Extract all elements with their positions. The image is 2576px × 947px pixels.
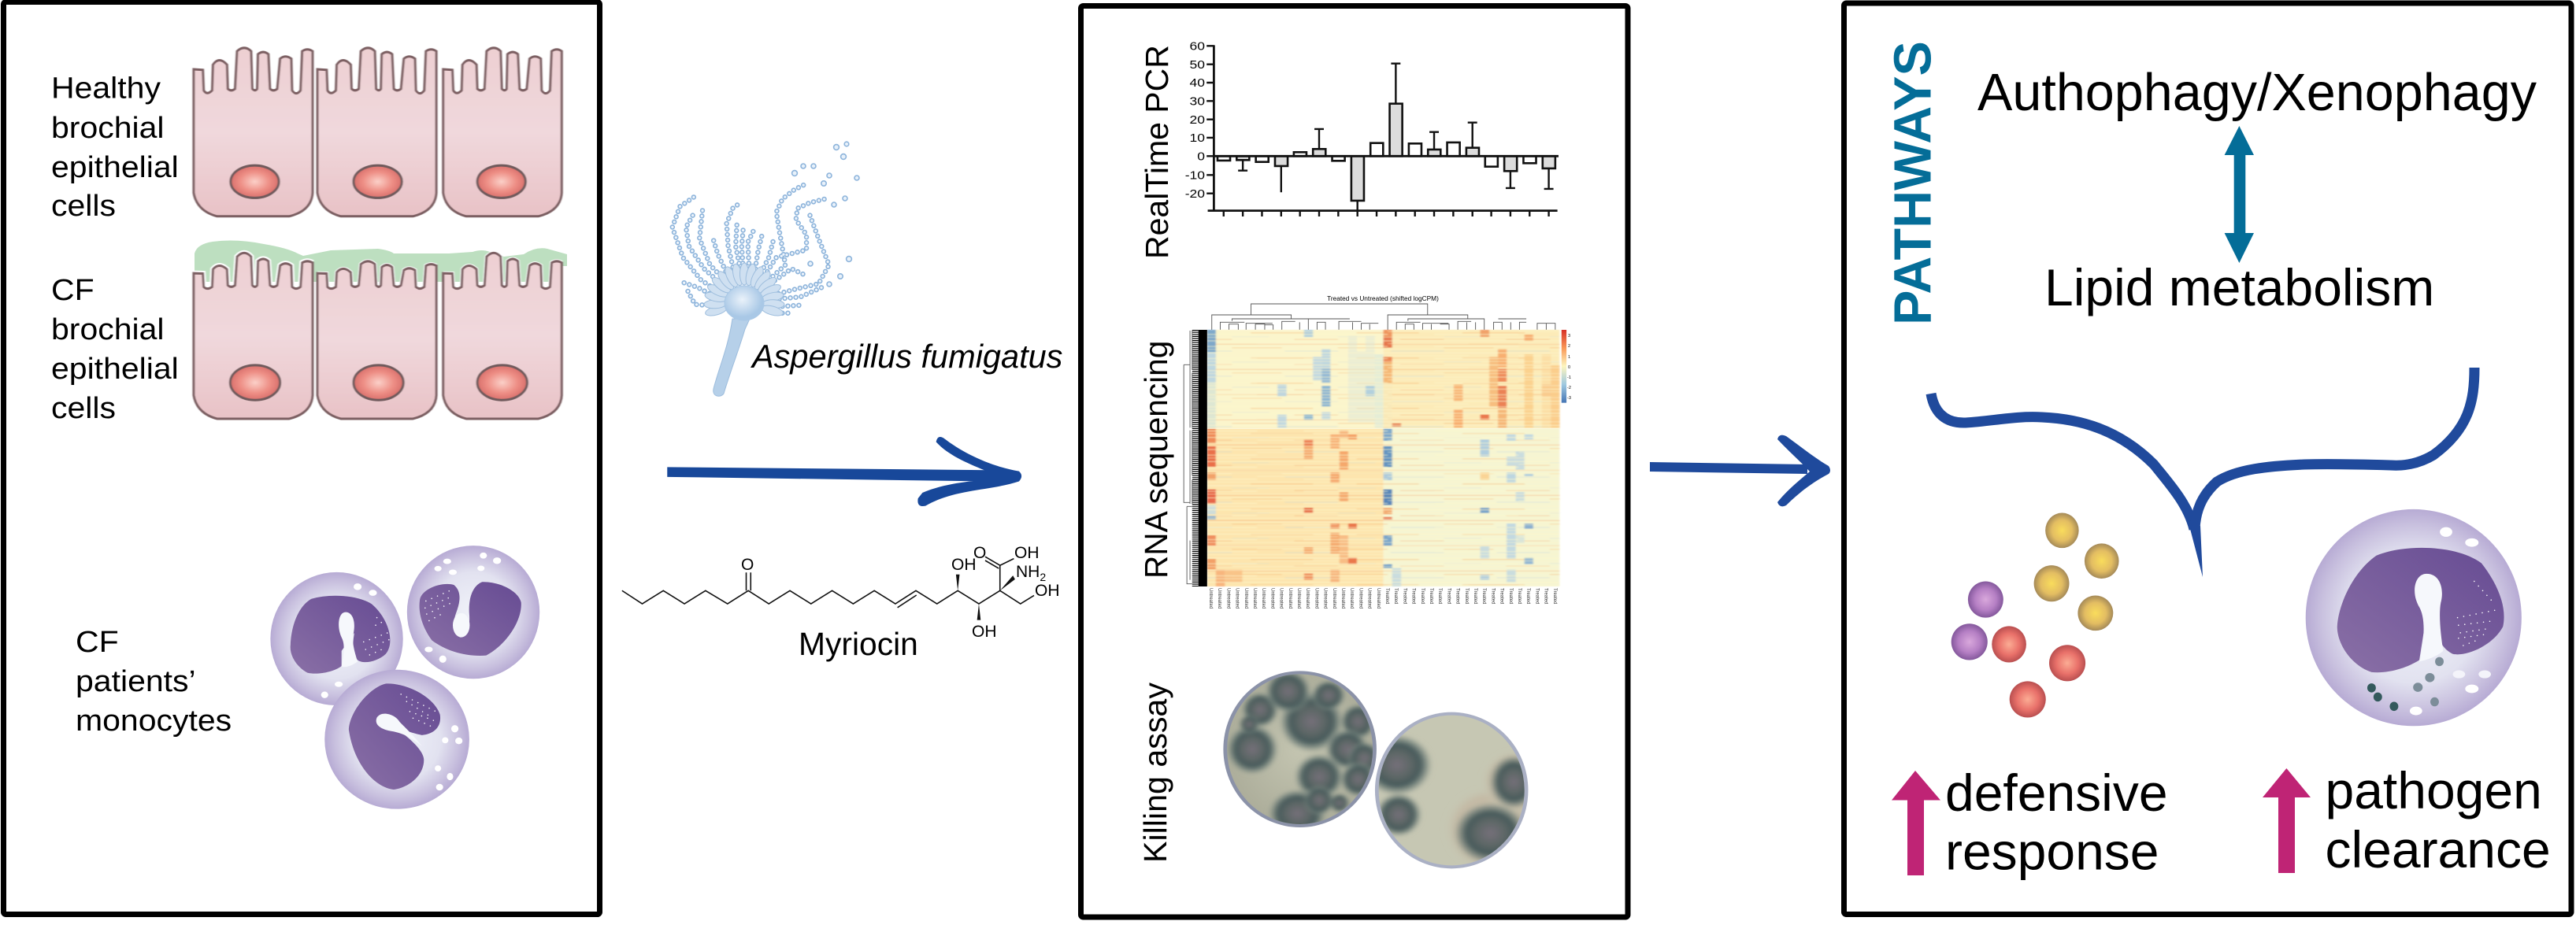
- panel: pathways and outcomes: [1844, 3, 2571, 915]
- loose spores: [792, 142, 859, 287]
- label: pathogen clearance: [2325, 761, 2551, 879]
- column labels: Treated: [1544, 588, 1548, 604]
- panel: experimental assays: [1080, 6, 1628, 917]
- column labels: Treated: [1490, 588, 1495, 604]
- label: Lipid metabolism: Lipid metabolism: [2044, 258, 2434, 316]
- diagram: myriocin structure: O: [973, 544, 986, 562]
- column labels: Treated: [1508, 588, 1513, 604]
- heatmap: treated vs untreated: -3: [1567, 396, 1571, 401]
- column labels: Treated: [1384, 588, 1389, 604]
- top dendrogram: [1212, 304, 1555, 330]
- label: healthy bronchial epithelial cells: [51, 72, 179, 223]
- label: CF patients' monocytes: patients’: [76, 664, 196, 698]
- label: CF bronchial epithelial cells: epithelial: [51, 352, 179, 386]
- bar chart: RealTime PCR: 10: [1190, 131, 1205, 145]
- bar chart: RealTime PCR: [1185, 40, 1559, 216]
- heatmap: treated vs untreated: [1184, 294, 1571, 609]
- bar chart: RealTime PCR: 40: [1190, 76, 1205, 90]
- column labels: Untreated: [1252, 588, 1257, 609]
- heatmap: treated vs untreated: -2: [1567, 386, 1571, 390]
- heatmap: treated vs untreated: 0: [1568, 365, 1570, 370]
- label: pathogen clearance: pathogen: [2325, 761, 2542, 819]
- brace: pathways converge on outcomes: [1931, 368, 2474, 577]
- heatmap: treated vs untreated: -1: [1567, 375, 1571, 380]
- column labels: Untreated: [1288, 588, 1292, 609]
- row labels block and row dendrogram: [1192, 330, 1199, 586]
- column labels: Treated: [1411, 588, 1416, 604]
- column labels: Treated: [1464, 588, 1469, 604]
- label: healthy bronchial epithelial cells: cells: [51, 189, 116, 223]
- heatmap: treated vs untreated: 2: [1568, 344, 1570, 349]
- bar chart: RealTime PCR: 0: [1197, 150, 1205, 163]
- column labels: Treated: [1402, 588, 1407, 604]
- column labels: Treated: [1499, 588, 1504, 604]
- column labels: Treated: [1446, 588, 1451, 604]
- column labels: Untreated: [1349, 588, 1354, 609]
- heatmap: treated vs untreated: 3: [1568, 334, 1570, 338]
- column labels: Untreated: [1332, 588, 1336, 609]
- column labels: Treated: [1393, 588, 1398, 604]
- diagram: myriocin structure: 2: [1040, 571, 1046, 583]
- label: healthy bronchial epithelial cells: Healthy: [51, 72, 161, 105]
- column labels: Untreated: [1358, 588, 1362, 609]
- label: pathogen clearance: clearance: [2325, 820, 2551, 879]
- column labels: Untreated: [1217, 588, 1221, 609]
- column labels: Untreated: [1279, 588, 1284, 609]
- label: CF patients' monocytes: [76, 625, 232, 738]
- column labels: [1208, 588, 1557, 609]
- icon: cytokine particles: [1951, 513, 2119, 718]
- column labels: Untreated: [1376, 588, 1381, 609]
- heading: RNA sequencing: RNA sequencing: [1138, 341, 1174, 579]
- column labels: Treated: [1437, 588, 1442, 604]
- diagram: myriocin structure: OH: [951, 556, 977, 574]
- label: defensive response: response: [1945, 822, 2159, 880]
- label: CF bronchial epithelial cells: CF: [51, 273, 95, 307]
- diagram: myriocin structure: NH: [1016, 563, 1040, 581]
- column labels: Untreated: [1314, 588, 1318, 609]
- arrow: increased pathogen clearance: [2263, 768, 2311, 873]
- icon: CF epithelial cell row: [194, 253, 562, 419]
- column labels: Treated: [1420, 588, 1425, 604]
- label: Aspergillus fumigatus: Aspergillus fumigatus: [750, 338, 1062, 375]
- column labels: Untreated: [1323, 588, 1328, 609]
- column labels: Untreated: [1261, 588, 1266, 609]
- arrow: bidirectional pathway link: [2225, 126, 2254, 263]
- bar chart: RealTime PCR: 50: [1190, 58, 1205, 72]
- label: CF bronchial epithelial cells: brochial: [51, 313, 165, 346]
- heatmap: treated vs untreated: Treated vs Untreated (shifted logCPM): [1327, 294, 1439, 302]
- column labels: Untreated: [1367, 588, 1372, 609]
- label: Myriocin: Myriocin: [799, 626, 918, 662]
- column labels: Treated: [1517, 588, 1522, 604]
- column labels: Untreated: [1305, 588, 1310, 609]
- stalk and vesicle: [704, 263, 784, 396]
- column labels: Untreated: [1244, 588, 1248, 609]
- icon: activated monocyte: [2306, 509, 2522, 726]
- arrow: assays to pathways: [1650, 435, 1830, 506]
- column labels: Treated: [1525, 588, 1530, 604]
- column labels: Treated: [1552, 588, 1557, 604]
- bar chart: RealTime PCR: -10: [1185, 169, 1205, 182]
- photo: culture plates: [1223, 669, 1550, 872]
- label: healthy bronchial epithelial cells: brochial: [51, 111, 165, 145]
- label: Authophagy/Xenophagy: Authophagy/Xenophagy: [1977, 64, 2537, 122]
- heading: RealTime PCR: RealTime PCR: [1139, 45, 1175, 259]
- heatmap: treated vs untreated: 1: [1568, 355, 1570, 360]
- column labels: Untreated: [1296, 588, 1301, 609]
- icon: three monocytes: [270, 546, 539, 809]
- column labels: Treated: [1534, 588, 1539, 604]
- panel: cell models: [3, 2, 600, 915]
- diagram: myriocin structure: [622, 544, 1060, 641]
- heading: PATHWAYS: PATHWAYS: [1884, 41, 1942, 325]
- column labels: Treated: [1429, 588, 1433, 604]
- bar chart: RealTime PCR: 30: [1190, 95, 1205, 108]
- label: CF bronchial epithelial cells: [51, 273, 179, 425]
- bar chart: RealTime PCR: 20: [1190, 113, 1205, 127]
- diagram: myriocin structure: O: [741, 556, 754, 574]
- arrow: increased defensive response: [1892, 771, 1940, 875]
- column labels: Untreated: [1208, 588, 1213, 609]
- diagram: myriocin structure: OH: [1014, 544, 1040, 562]
- icon: healthy epithelial cell row: [194, 48, 562, 216]
- bar chart: RealTime PCR: -20: [1185, 187, 1205, 201]
- column labels: Untreated: [1269, 588, 1274, 609]
- bar chart: RealTime PCR: 60: [1190, 40, 1205, 53]
- column labels: Treated: [1455, 588, 1460, 604]
- diagram: myriocin structure: OH: [1035, 582, 1060, 600]
- plate 1: [1223, 671, 1377, 827]
- label: CF patients' monocytes: CF: [76, 625, 119, 659]
- column labels: Treated: [1481, 588, 1486, 604]
- arrow: treatment to assays: [667, 437, 1021, 506]
- label: CF patients' monocytes: monocytes: [76, 704, 232, 738]
- illustration: Aspergillus fumigatus conidiophore: [673, 142, 859, 396]
- heat cells: [1207, 330, 1559, 586]
- column labels: Treated: [1473, 588, 1477, 604]
- diagram: myriocin structure: OH: [972, 623, 997, 641]
- label: healthy bronchial epithelial cells: epithelial: [51, 150, 179, 184]
- spore chains: [673, 183, 829, 313]
- label: defensive response: defensive: [1945, 764, 2168, 822]
- plate 2: [1375, 712, 1528, 869]
- column labels: Untreated: [1225, 588, 1230, 609]
- colour scale: [1562, 330, 1566, 403]
- label: CF bronchial epithelial cells: cells: [51, 391, 116, 425]
- label: defensive response: [1945, 764, 2168, 880]
- column labels: Untreated: [1235, 588, 1240, 609]
- heading: Killing assay: Killing assay: [1137, 683, 1173, 863]
- column labels: Untreated: [1340, 588, 1345, 609]
- icon: mucus layer: [195, 241, 567, 282]
